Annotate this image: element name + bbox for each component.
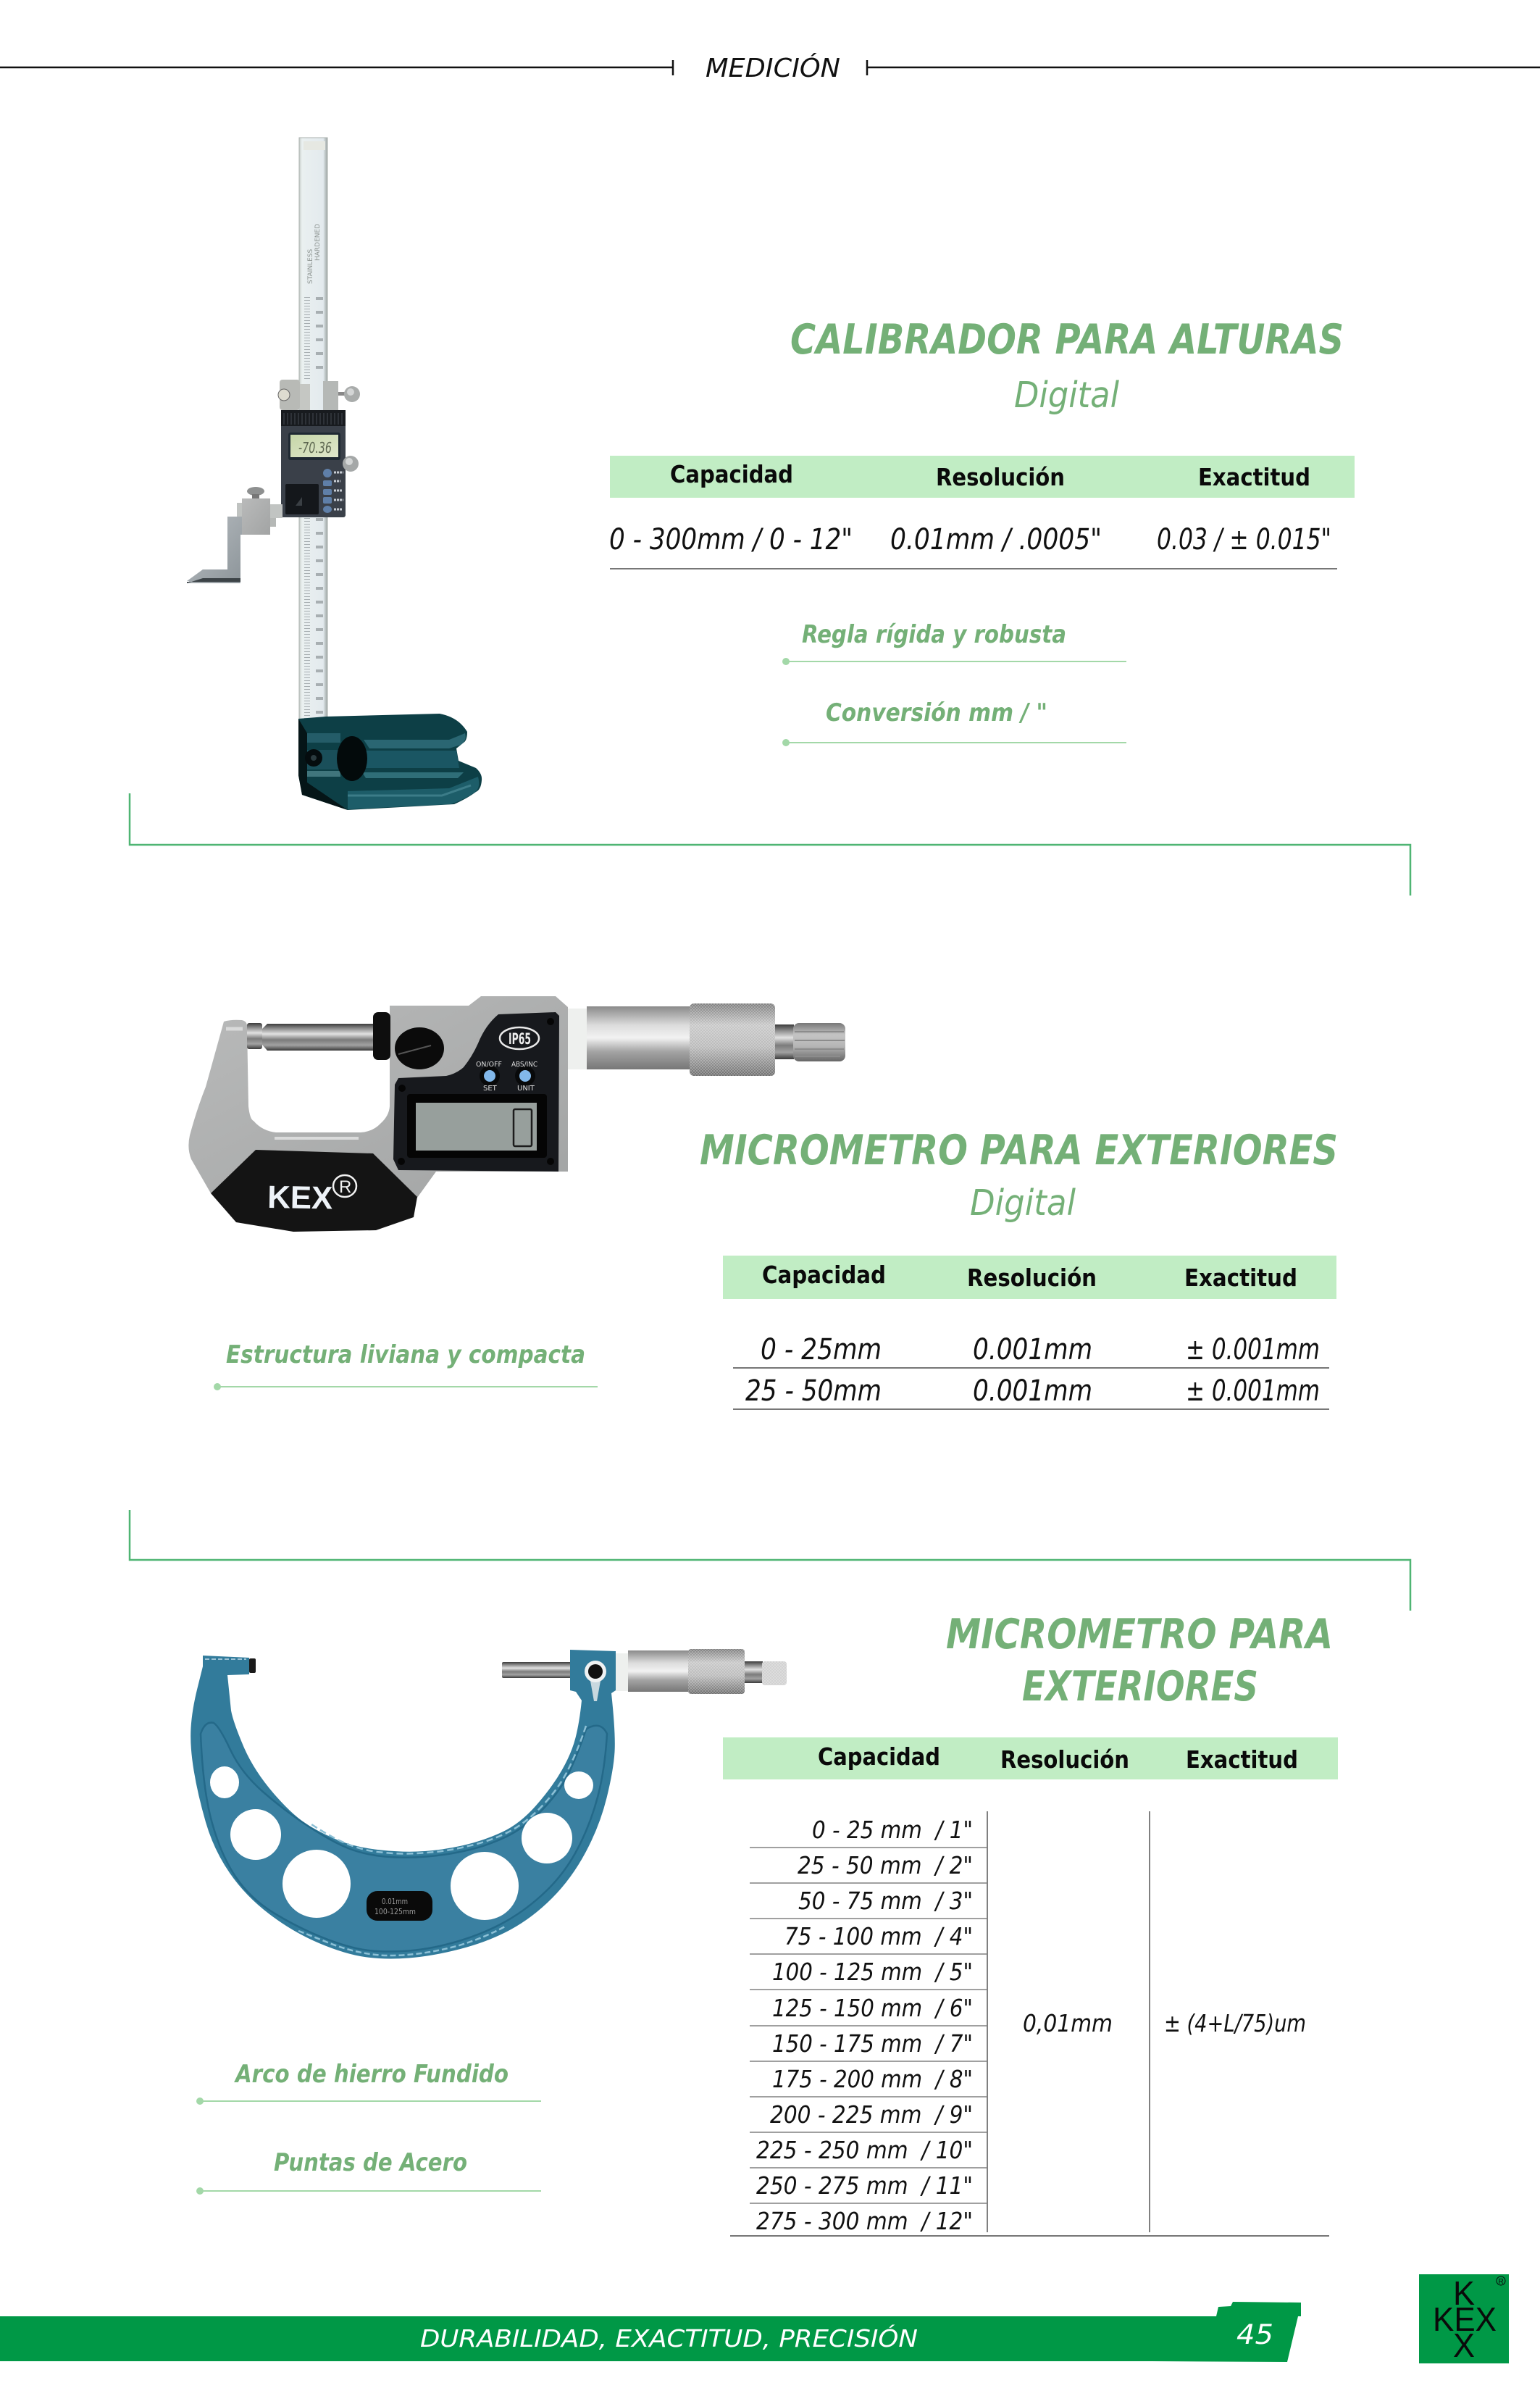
spec table: 25 - 50mm: [745, 1374, 882, 1408]
fixed anvil: [249, 1658, 256, 1673]
capacity rows: 225 - 250 mm / 10": [756, 2136, 973, 2164]
spec table: 0.001mm: [973, 1374, 1092, 1408]
spec table: 0.03 / ± 0.015": [1157, 523, 1331, 556]
logo: KEX: X: [1453, 2326, 1475, 2364]
capacity rows: 50 - 75 mm / 3": [798, 1887, 973, 1915]
ruler: STAINLESS: [307, 249, 314, 284]
capacity rows: 150 - 175 mm / 7": [772, 2029, 973, 2058]
spec table: [723, 1256, 1336, 1410]
footer band: [0, 2302, 1301, 2362]
lcd: [407, 1094, 547, 1158]
product title: MICROMETRO PARA EXTERIORES: [700, 1127, 1338, 1174]
capacity rows: [730, 1811, 1329, 2237]
capacity rows: 25 - 50 mm / 2": [798, 1851, 973, 1879]
header: section rule and title: [0, 53, 1540, 83]
spec table: Exactitud: [1184, 1264, 1297, 1292]
capacity rows: 0 - 25 mm / 1": [812, 1816, 973, 1844]
spec table: 0 - 25mm: [761, 1333, 882, 1366]
capacity rows: 125 - 150 mm / 6": [772, 1994, 973, 2022]
capacity rows: 175 - 200 mm / 8": [772, 2065, 973, 2093]
spindle: [502, 1662, 574, 1678]
ip65 badge: IP65: [509, 1030, 531, 1048]
mode buttons: ABS/INC: [511, 1061, 537, 1069]
section title: MEDICIÓN: [706, 53, 840, 83]
spec table: Exactitud: [1198, 463, 1310, 491]
feature callout: Conversión mm / ": [826, 698, 1047, 727]
ratchet: [775, 1023, 845, 1061]
page number: 45: [1236, 2319, 1273, 2350]
illustration: digital height gauge: [187, 138, 482, 810]
mode buttons: SET: [483, 1085, 498, 1093]
function buttons: [323, 469, 343, 513]
top clamp: [278, 380, 360, 410]
slogan: DURABILIDAD, EXACTITUD, PRECISIÓN: [420, 2324, 918, 2353]
spec table: ± 0.001mm: [1186, 1374, 1320, 1408]
capacity rows: 275 - 300 mm / 12": [756, 2207, 973, 2235]
spindle: [247, 1012, 390, 1060]
ruler: HARDENED: [314, 224, 322, 261]
feature callout: [214, 1340, 598, 1390]
thimble: [690, 1003, 775, 1076]
logo: KEX: [1419, 2274, 1509, 2364]
capacity rows: 250 - 275 mm / 11": [756, 2171, 973, 2200]
digital readout unit: [281, 410, 346, 517]
logo: KEX: KEX: [1433, 2300, 1497, 2338]
ruler: [299, 138, 327, 732]
c-frame: [191, 1650, 616, 1958]
subtitle: Digital: [970, 1182, 1076, 1224]
spec table: 0.001mm: [973, 1333, 1092, 1366]
spindle lock: [585, 1661, 606, 1701]
spec table: 0.01mm / .0005": [890, 523, 1102, 556]
range plate: [367, 1891, 432, 1921]
logo: KEX: K: [1453, 2274, 1475, 2312]
panel: micrometro para exteriores: [196, 1611, 1338, 2237]
section divider frame: [130, 793, 1410, 896]
mode buttons: ON/OFF: [476, 1061, 502, 1069]
section divider frame: [130, 1510, 1410, 1611]
mode buttons: [476, 1061, 537, 1093]
feature callout: Puntas de Acero: [274, 2148, 467, 2177]
battery flap: [285, 484, 319, 514]
table header: Exactitud: [1186, 1745, 1298, 1774]
spec table: ± 0.001mm: [1186, 1333, 1320, 1366]
lock knob: [395, 1027, 444, 1069]
feature callout: Arco de hierro Fundido: [233, 2060, 509, 2089]
black grip with brand: [211, 1150, 417, 1232]
feature callout: Regla rígida y robusta: [802, 620, 1066, 649]
range plate: 100-125mm: [374, 1907, 416, 1916]
feature callout: [782, 698, 1126, 746]
lcd screen: [288, 433, 340, 460]
subtitle: Digital: [1014, 375, 1119, 416]
product title: CALIBRADOR PARA ALTURAS: [790, 316, 1344, 364]
display panel: [393, 1012, 559, 1172]
illustration: digital outside micrometer: [188, 996, 845, 1232]
capacity rows: 75 - 100 mm / 4": [784, 1922, 973, 1950]
table header: Capacidad: [818, 1742, 940, 1771]
spec table: [609, 456, 1355, 569]
white ring: [566, 1009, 587, 1069]
ip65 badge: [500, 1027, 539, 1049]
frame: [188, 996, 568, 1198]
spec table: 0 - 300mm / 0 - 12": [609, 523, 853, 556]
product title: EXTERIORES: [1022, 1663, 1258, 1711]
range plate: 0.01mm: [382, 1897, 408, 1906]
table header: Resolución: [1000, 1745, 1129, 1774]
feature callout: [782, 620, 1126, 665]
feature callout: [196, 2060, 541, 2105]
capacity rows: 200 - 225 mm / 9": [770, 2100, 973, 2129]
panel: calibrador para alturas: [609, 316, 1355, 746]
spec table: Capacidad: [670, 460, 793, 488]
resolution value: 0,01mm: [1023, 2009, 1113, 2037]
lcd screen: -70.36: [298, 439, 332, 456]
feature callout: Estructura liviana y compacta: [226, 1340, 585, 1369]
feature callout: [196, 2148, 541, 2195]
sleeve: [587, 1006, 690, 1069]
capacity rows: 100 - 125 mm / 5": [772, 1958, 973, 1986]
black grip with brand: KEX: [267, 1180, 333, 1216]
product title: [946, 1611, 1333, 1711]
spec table: Resolución: [967, 1264, 1097, 1292]
illustration: outside micrometer with blue frame: [191, 1649, 787, 1958]
table header: [723, 1737, 1338, 1779]
cast iron base: [298, 714, 482, 810]
mode buttons: UNIT: [517, 1085, 535, 1093]
right knob: [343, 456, 359, 472]
accuracy value: ± (4+L/75)um: [1164, 2009, 1306, 2037]
black grip with brand: R: [339, 1177, 351, 1197]
depth attachment: [187, 487, 283, 583]
recessed web: [201, 1723, 607, 1952]
spec table: Capacidad: [762, 1261, 886, 1289]
logo: KEX: R: [1498, 2278, 1504, 2286]
product title: MICROMETRO PARA: [946, 1611, 1333, 1658]
spec table: Resolución: [936, 463, 1065, 491]
frame holes: [210, 1766, 593, 1920]
rim highlights: [309, 1726, 586, 1853]
panel: micrometro para exteriores digital: [214, 1127, 1338, 1410]
barrel: [614, 1649, 787, 1694]
